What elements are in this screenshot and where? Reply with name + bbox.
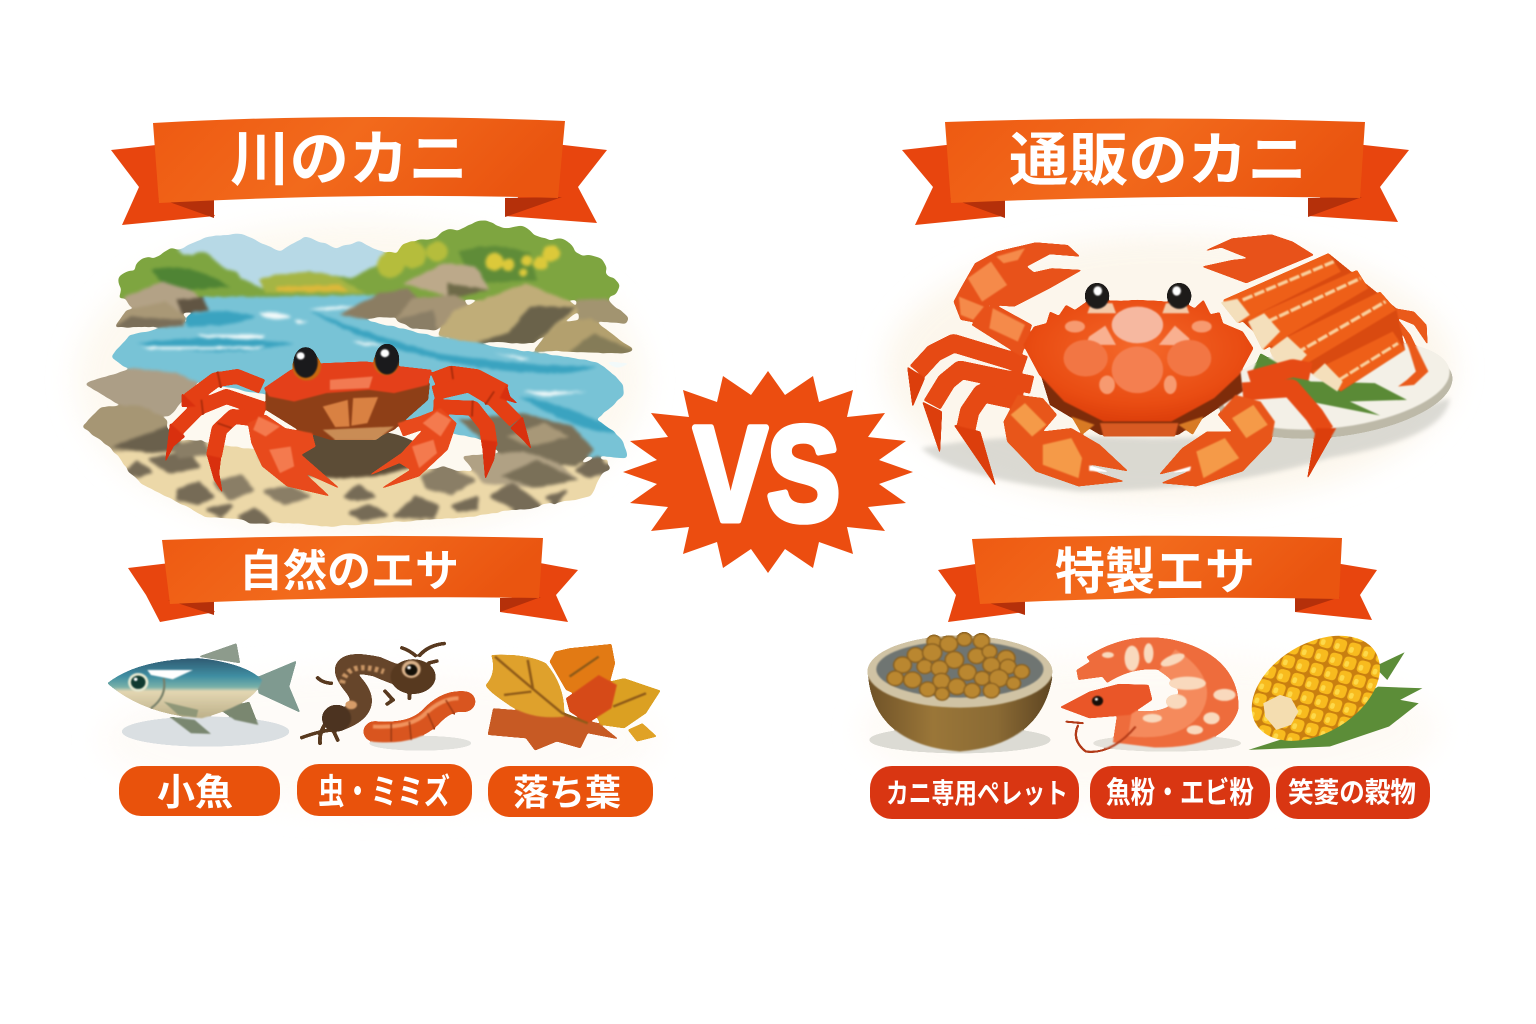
badge: VS starburst [623,371,913,573]
ribbon heading: 川のカニ [111,117,607,225]
leaf garnish [1252,353,1407,415]
label: 虫・ミミズ: 虫・ミミズ [318,772,450,812]
plate [1212,328,1459,451]
panel: mail-order crab [867,118,1459,819]
river crab body [266,383,430,440]
ribbon heading: 通販のカニ: 通販のカニ [1009,128,1307,193]
lower claws [1004,395,1275,486]
ribbon heading: 自然のエサ [128,536,578,622]
ribbon heading: 通販のカニ [902,118,1409,225]
river crab eyes [292,344,399,381]
landscape [82,220,633,526]
forest [119,220,619,300]
walking legs [917,343,1325,431]
boulders [82,263,633,526]
illustration: crab on a plate [907,234,1459,491]
label: 落ち葉 [488,766,653,817]
crab artwork [907,234,1459,487]
river crab legs [176,373,516,456]
ground shadow [921,398,1450,491]
panel: river crab [82,117,661,817]
badge: VS starburst: VS [694,400,840,549]
label: カニ専用ペレット: カニ専用ペレット [886,778,1068,809]
mountains [176,233,394,297]
sand and lower stones [112,440,608,526]
river crab [165,344,532,496]
carapace highlights [1064,307,1212,394]
label: 笑菱の穀物: 笑菱の穀物 [1288,777,1416,808]
ribbon heading: 川のカニ: 川のカニ [230,126,468,193]
label: 笑菱の穀物 [1276,766,1430,819]
underside [1036,358,1243,435]
group: natural foods [107,643,661,817]
river crab claws [248,415,341,496]
walking leg tips [907,367,1336,487]
label: 落ち葉: 落ち葉 [513,772,621,813]
carapace [1023,300,1253,421]
upper claws [954,234,1314,357]
label: 小魚 [119,766,280,816]
back legs [1394,308,1428,387]
label: カニ専用ペレット [870,766,1079,819]
icon: fallen leaves [486,644,661,751]
label: 魚粉・エビ粉: 魚粉・エビ粉 [1106,777,1254,810]
leg joints [201,367,494,428]
ribbon heading: 特製エサ: 特製エサ [1055,544,1255,600]
icon: small fish [107,643,300,747]
claw mottling [959,248,1025,342]
icon: bowl of pellets [867,633,1052,753]
ribbon heading: 自然のエサ: 自然のエサ [239,547,459,596]
soft paper glow [75,220,1455,810]
label: 魚粉・エビ粉 [1090,766,1270,819]
label: 小魚: 小魚 [157,772,233,813]
icon: shrimp [1060,643,1241,752]
illustration: river scene with crab [82,220,633,526]
icon: corn on leaves [1229,614,1422,762]
river crab leg tips [165,385,532,494]
river water [111,295,633,458]
group: special feed [867,614,1430,819]
crab leg bundle [1221,253,1405,392]
eyes [1085,283,1191,313]
icon: insect and earthworm [300,643,471,751]
ribbon heading: 特製エサ [938,536,1377,622]
label: 虫・ミミズ [297,764,472,816]
